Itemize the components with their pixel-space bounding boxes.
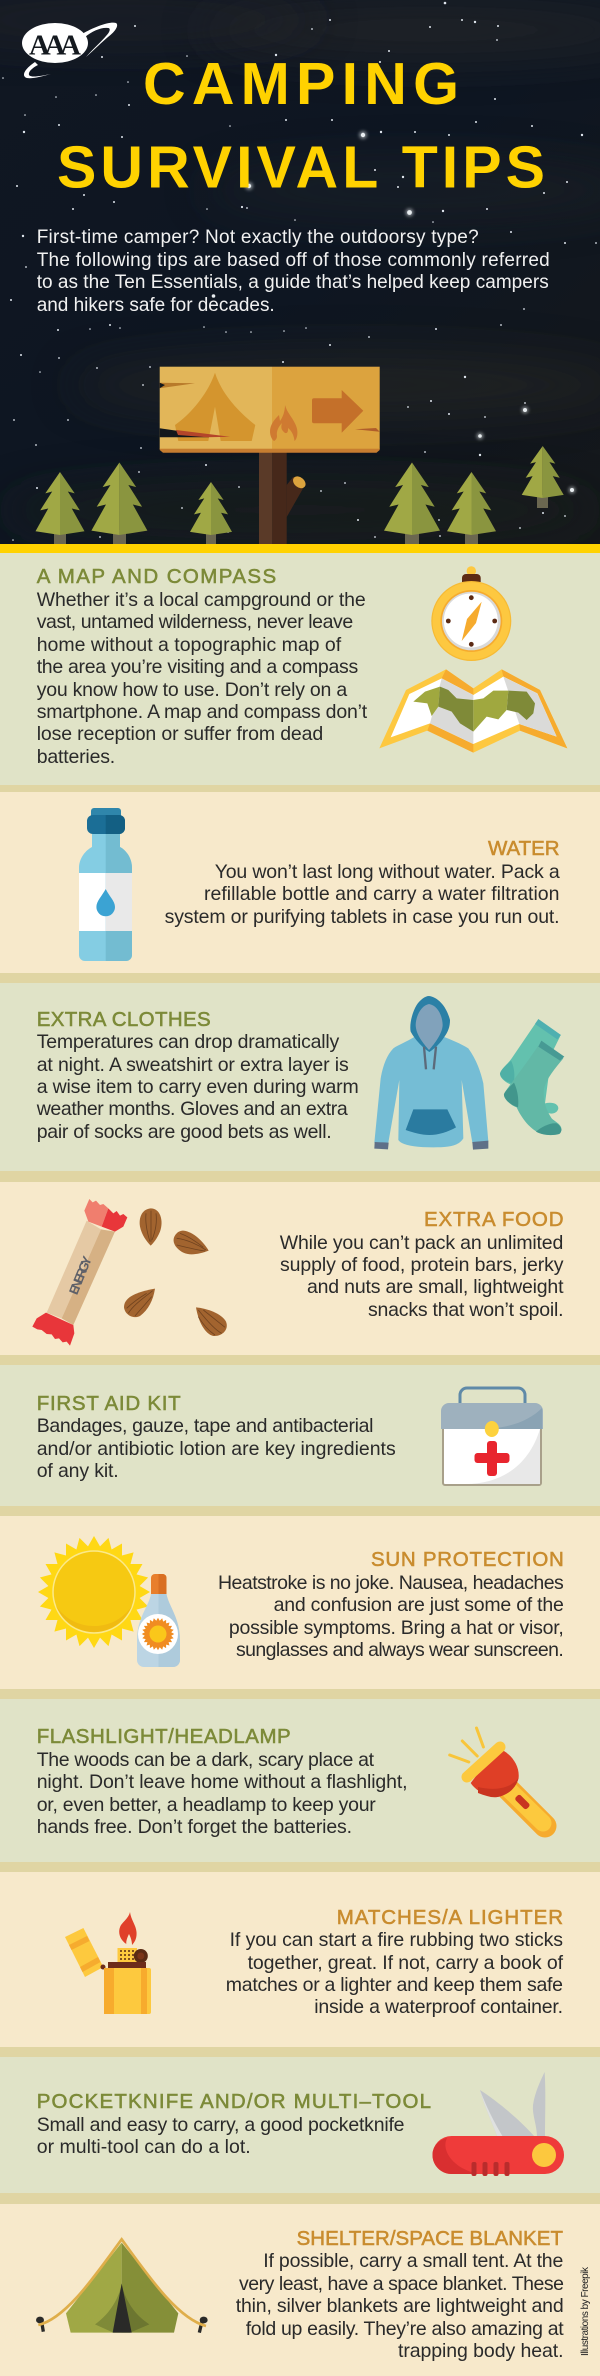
icon: flame on sign (270, 405, 297, 441)
title (57, 51, 545, 200)
body: sun protection: Heatstroke is no joke. Nausea, headaches (218, 1572, 564, 1594)
heading: extra clothes: EXTRA CLOTHES (37, 1008, 211, 1031)
body: extra clothes: a wise item to carry even during warm (37, 1076, 359, 1098)
body: map and compass: lose reception or suffer from dead (37, 723, 323, 745)
body: pocketknife: Small and easy to carry, a good pocketknife (37, 2114, 404, 2136)
title: CAMPING (143, 51, 459, 117)
body: extra food (280, 1232, 564, 1321)
title: SURVIVAL TIPS (57, 134, 545, 200)
body: pocketknife: or multi-tool can do a lot. (37, 2136, 251, 2158)
body: map and compass: vast, untamed wilderness, never leave (37, 611, 353, 633)
panel: matches/a lighter (0, 1872, 600, 2047)
panel: sun protection (0, 1516, 600, 1689)
logo: AAA: AAA (29, 30, 81, 62)
heading: sun protection: SUN PROTECTION (371, 1548, 564, 1571)
icon: hoodie (374, 996, 488, 1150)
body: matches/a lighter: together, great. If not, carry a book of (248, 1952, 564, 1974)
body: map and compass: home without a topographic map of (37, 634, 342, 656)
body: extra food: and nuts are small, lightweight (307, 1276, 564, 1298)
body: extra food: snacks that won’t spoil. (368, 1299, 564, 1321)
body: flashlight/headlamp: The woods can be a dark, scary place at (37, 1749, 375, 1771)
body: sun protection: possible symptoms. Bring a hat or visor, (229, 1617, 564, 1639)
icon: almonds (124, 1208, 227, 1336)
body: flashlight/headlamp: night. Don’t leave home without a flashlight, (37, 1771, 408, 1793)
body: shelter/space blanket: thin, silver blankets are lightweight and (236, 2295, 564, 2317)
body: extra clothes: at night. A sweatshirt or extra layer is (37, 1054, 349, 1076)
body: extra clothes: Temperatures can drop dramatically (37, 1031, 339, 1053)
body: map and compass (37, 589, 368, 768)
body: map and compass: batteries. (37, 746, 115, 768)
intro text: The following tips are based off of those commonly referred (37, 250, 550, 271)
body: extra clothes: pair of socks are good bets as well. (37, 1121, 332, 1143)
header: night sky (0, 0, 600, 544)
body: matches/a lighter: inside a waterproof container. (314, 1996, 563, 2018)
heading: map and compass: A MAP AND COMPASS (37, 565, 276, 588)
body: flashlight/headlamp: or, even better, a headlamp to keep your (37, 1794, 376, 1816)
panel: water (0, 792, 600, 973)
icon: socks (500, 1019, 564, 1135)
icon: flashlight (450, 1728, 545, 1826)
body: extra food: supply of food, protein bars, jerky (280, 1254, 564, 1276)
body: matches/a lighter: matches or a lighter and keep them safe (226, 1974, 563, 1996)
body: sun protection: sunglasses and always wear sunscreen. (236, 1639, 564, 1661)
panel: a map and compass (0, 553, 600, 785)
body: shelter/space blanket: very least, have a space blanket. These (239, 2273, 564, 2295)
sign post (160, 367, 380, 544)
icon: compass (431, 566, 511, 661)
body: shelter/space blanket: If possible, carry a small tent. At the (263, 2250, 563, 2272)
body: matches/a lighter: If you can start a fire rubbing two sticks (230, 1929, 563, 1951)
body: water: refillable bottle and carry a water filtration (204, 883, 560, 905)
heading: flashlight/headlamp: FLASHLIGHT/HEADLAMP (37, 1725, 291, 1748)
body: shelter/space blanket (236, 2250, 564, 2362)
icon: sun (38, 1536, 150, 1648)
body: first aid kit: Bandages, gauze, tape and antibacterial (37, 1415, 373, 1437)
heading: matches/a lighter: MATCHES/A LIGHTER (337, 1906, 563, 1929)
trees (36, 446, 564, 544)
logo: AAA (22, 23, 117, 78)
icon: first aid kit (441, 1388, 543, 1485)
panel: first aid kit (0, 1365, 600, 1506)
credit: Illustrations by Freepik (580, 2266, 591, 2356)
body: map and compass: you know how to use. Don’t rely on a (37, 679, 347, 701)
icon: pocketknife (432, 2072, 564, 2176)
panel: shelter/space blanket (0, 2204, 600, 2376)
body: map and compass: the area you’re visiting and a compass (37, 656, 358, 678)
intro text: First-time camper? Not exactly the outdoorsy type? (37, 227, 479, 248)
body: extra food: While you can’t pack an unlimited (280, 1232, 563, 1254)
icon: tent on sign (175, 373, 255, 441)
body: pocketknife (37, 2114, 404, 2158)
body: water (165, 861, 560, 928)
body: sun protection: and confusion are just some of the (274, 1594, 564, 1616)
body: sun protection (218, 1572, 564, 1661)
heading: shelter/space blanket: SHELTER/SPACE BLANKET (297, 2227, 563, 2250)
body: first aid kit (37, 1415, 396, 1482)
panel: pocketknife and/or multi-tool (0, 2057, 600, 2193)
heading: water: WATER (488, 837, 560, 860)
body: map and compass: Whether it’s a local campground or the (37, 589, 366, 611)
icon: tent (36, 2239, 208, 2333)
body: extra clothes: weather months. Gloves and an extra (36, 1098, 348, 1120)
body: matches/a lighter (226, 1929, 564, 2018)
body: extra clothes (36, 1031, 359, 1143)
panel: flashlight/headlamp (0, 1699, 600, 1862)
panel: extra clothes (0, 983, 600, 1171)
body: flashlight/headlamp (37, 1749, 408, 1838)
icon: arrow on sign (312, 390, 363, 433)
panel: extra food (0, 1182, 600, 1355)
body: flashlight/headlamp: hands free. Don’t forget the batteries. (37, 1816, 352, 1838)
body: shelter/space blanket: trapping body heat. (398, 2340, 564, 2362)
icon: energy bar: ENERGY (66, 1254, 95, 1297)
icon: water bottle (79, 808, 132, 961)
body: first aid kit: of any kit. (37, 1460, 119, 1482)
icon: lighter (65, 1912, 151, 2014)
icon: sunscreen bottle (137, 1574, 180, 1667)
heading: pocketknife: POCKETKNIFE AND/OR MULTI–TOOL (37, 2090, 431, 2113)
icon: map (379, 669, 567, 753)
intro text: and hikers safe for decades. (37, 295, 275, 316)
intro text: to as the Ten Essentials, a guide that’s helped keep campers (37, 272, 549, 293)
icon: energy bar (32, 1199, 127, 1346)
body: first aid kit: and/or antibiotic lotion are key ingredients (37, 1438, 396, 1460)
body: shelter/space blanket: fold up easily. They’re also amazing at (246, 2318, 564, 2340)
intro text (37, 227, 550, 316)
body: water: system or purifying tablets in case you run out. (165, 906, 560, 928)
body: water: You won’t last long without water. Pack a (215, 861, 560, 883)
body: map and compass: smartphone. A map and compass don’t (37, 701, 368, 723)
heading: extra food: EXTRA FOOD (424, 1208, 564, 1231)
heading: first aid kit: FIRST AID KIT (37, 1392, 181, 1415)
